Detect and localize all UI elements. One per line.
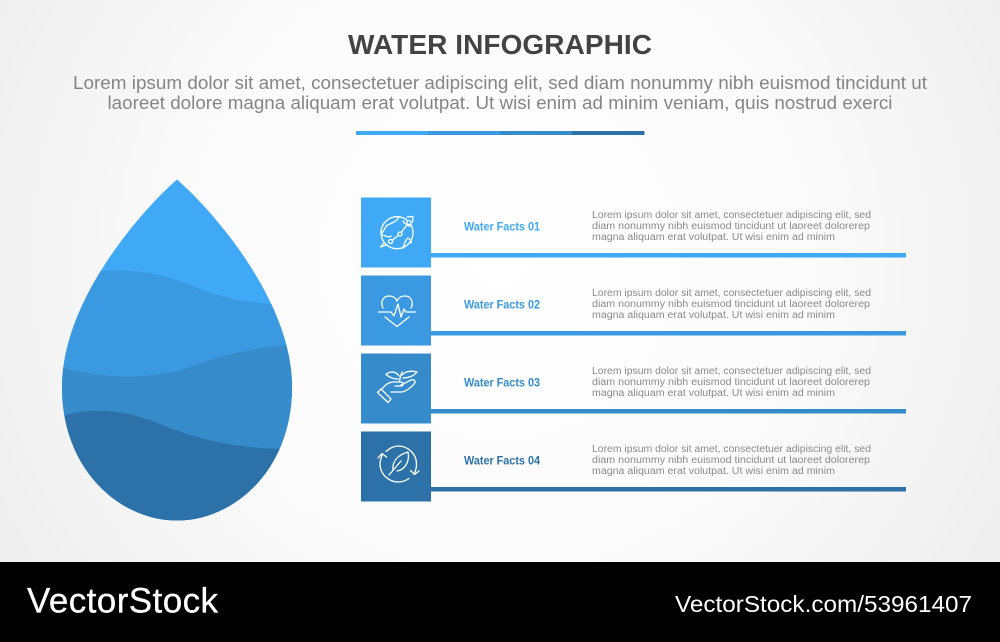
row 2 description bbox=[592, 288, 871, 321]
row 4 description: magna aliquam erat volutpat. Ut wisi enim ad minim bbox=[592, 466, 835, 477]
row 2 connector line bbox=[431, 331, 906, 336]
subtitle text block bbox=[73, 72, 927, 113]
row 4 description: Lorem ipsum dolor sit amet, consectetuer adipiscing elit, sed bbox=[592, 444, 871, 455]
row 1 description: diam nonummy nibh euismod tincidunt ut laoreet dolorerep bbox=[592, 221, 870, 232]
row 1 icon tile bbox=[361, 198, 431, 268]
row 3 description: Lorem ipsum dolor sit amet, consectetuer adipiscing elit, sed bbox=[592, 366, 871, 377]
row 4: water facts 04 bbox=[361, 432, 906, 502]
row 3 connector line bbox=[431, 409, 906, 414]
footer bar bbox=[0, 562, 1000, 642]
icon: hand holding plant bbox=[378, 371, 417, 402]
title: WATER INFOGRAPHIC bbox=[348, 29, 652, 60]
row 1 description: Lorem ipsum dolor sit amet, consectetuer adipiscing elit, sed bbox=[592, 210, 871, 221]
row 1: water facts 01 bbox=[361, 198, 906, 268]
row 2 heading: Water Facts 02 bbox=[464, 300, 540, 312]
icon: globe bbox=[380, 216, 413, 249]
row 4 heading: Water Facts 04 bbox=[464, 456, 541, 468]
row 3 icon tile bbox=[361, 354, 431, 424]
row 2 description: Lorem ipsum dolor sit amet, consectetuer adipiscing elit, sed bbox=[592, 288, 871, 299]
row 3 description: diam nonummy nibh euismod tincidunt ut laoreet dolorerep bbox=[592, 377, 870, 388]
row 2: water facts 02 bbox=[361, 276, 906, 346]
row 2 description: magna aliquam erat volutpat. Ut wisi enim ad minim bbox=[592, 310, 835, 321]
row 1 heading: Water Facts 01 bbox=[464, 222, 541, 234]
row 4 icon tile bbox=[361, 432, 431, 502]
row 2 icon tile bbox=[361, 276, 431, 346]
row 1 connector line bbox=[431, 253, 906, 258]
row 2 description: diam nonummy nibh euismod tincidunt ut laoreet dolorerep bbox=[592, 299, 870, 310]
footer image id: VectorStock.com/53961407 bbox=[675, 591, 972, 617]
subtitle text block: laoreet dolore magna aliquam erat volutpat. Ut wisi enim ad minim veniam, quis nostrud exerci bbox=[108, 92, 892, 113]
row 3: water facts 03 bbox=[361, 354, 906, 424]
four colour title divider bbox=[356, 131, 644, 135]
row 4 description: diam nonummy nibh euismod tincidunt ut laoreet dolorerep bbox=[592, 455, 870, 466]
row 3 description bbox=[592, 366, 871, 399]
row 4 description bbox=[592, 444, 871, 477]
subtitle text block: Lorem ipsum dolor sit amet, consectetuer adipiscing elit, sed diam nonummy nibh euismod tincidunt ut bbox=[73, 72, 927, 93]
row 3 heading: Water Facts 03 bbox=[464, 378, 540, 390]
row 1 description bbox=[592, 210, 871, 243]
row 4 connector line bbox=[431, 487, 906, 492]
water drop with wave layers bbox=[55, 175, 300, 525]
row 3 description: magna aliquam erat volutpat. Ut wisi enim ad minim bbox=[592, 388, 835, 399]
icon: leaf in recycling arrows bbox=[378, 446, 419, 482]
footer logo text: VectorStock bbox=[27, 582, 218, 620]
row 1 description: magna aliquam erat volutpat. Ut wisi enim ad minim bbox=[592, 232, 835, 243]
icon: heart with pulse bbox=[378, 296, 416, 326]
